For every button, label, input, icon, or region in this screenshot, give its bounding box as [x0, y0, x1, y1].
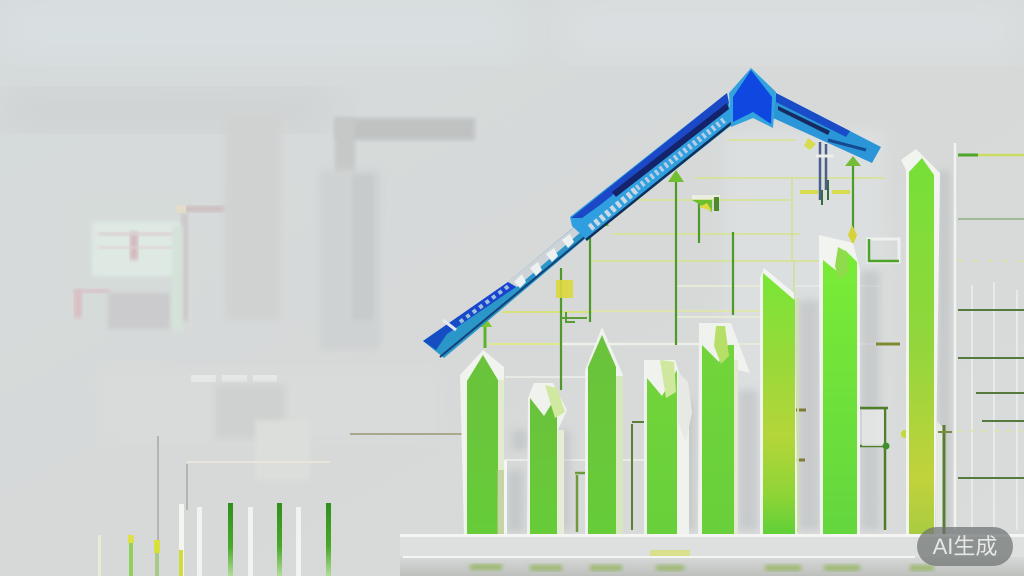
bar 2 [527, 383, 567, 535]
blurred ghost panel on the left [68, 115, 475, 480]
bar 6 [760, 268, 799, 535]
bar 7 [819, 235, 860, 535]
blue arrow [423, 68, 881, 358]
bar 8 [901, 149, 940, 535]
bar 1 [460, 350, 507, 535]
bar 4 [644, 360, 692, 535]
ground platform [400, 534, 1024, 576]
badge: AI generated: AI生成 [933, 534, 997, 559]
background grid lines [158, 140, 900, 540]
badge: AI generated [917, 527, 1013, 566]
bar 5 [698, 323, 750, 535]
bar 3 [585, 327, 623, 535]
right background chart lines [936, 143, 1024, 535]
small bars lower left [98, 503, 331, 576]
shadows of the bars [507, 170, 950, 532]
connector lines and small markers [478, 138, 909, 532]
